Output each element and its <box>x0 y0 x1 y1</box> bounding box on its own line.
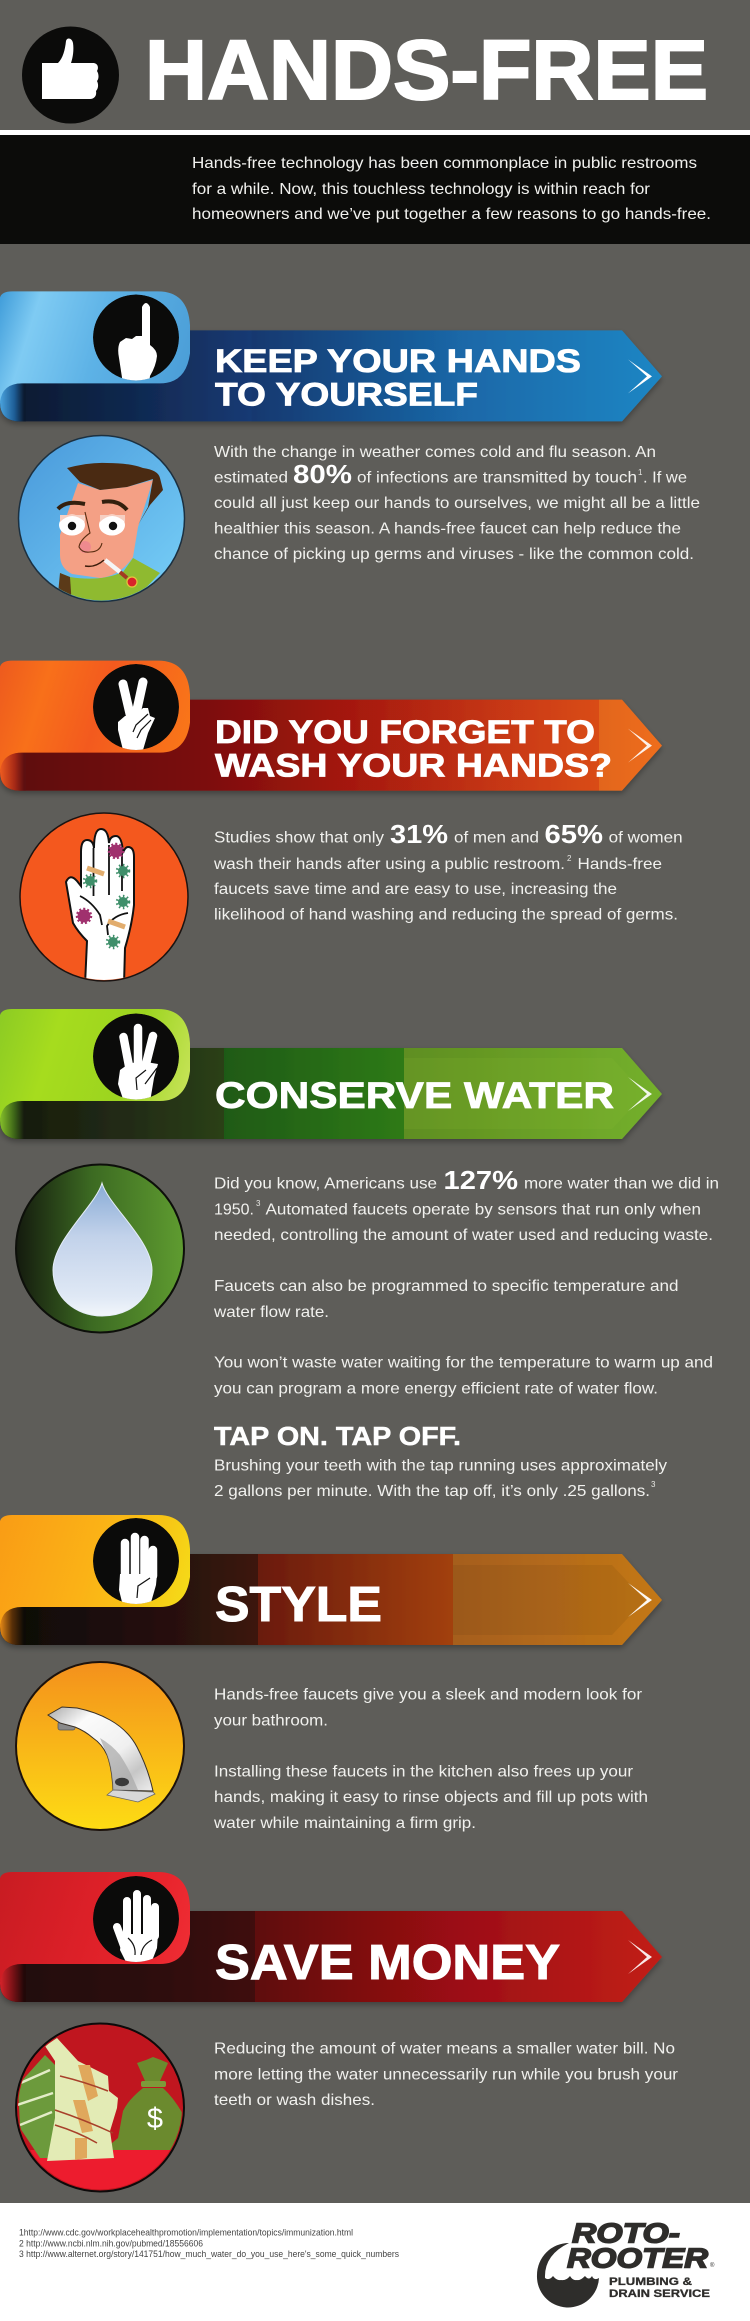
sources <box>19 2228 399 2260</box>
intro text: Hands-free technology has been commonplace in public restrooms <box>192 155 697 172</box>
text: wash your hands <box>213 819 683 924</box>
text: conserve water: water flow rate. <box>213 1304 329 1321</box>
money bag <box>112 2057 182 2150</box>
logo: roto-rooter: ROTO- <box>572 2218 680 2248</box>
illustration: money <box>10 2024 190 2200</box>
text: keep your hands: chance of picking up germs and viruses - like the common cold. <box>214 546 694 563</box>
text: conserve water: needed, controlling the amount of water used and reducing waste. <box>214 1227 713 1244</box>
text: keep your hands: With the change in weather comes cold and flu season. An <box>214 444 656 461</box>
germs <box>77 844 129 948</box>
logo: roto-rooter: DRAIN SERVICE <box>609 2288 710 2300</box>
icon: four fingers <box>93 1518 179 1606</box>
text: wash your hands: 2 <box>567 854 572 863</box>
sources: 1http://www.cdc.gov/workplacehealthpromotion/implementation/topics/immunization.html <box>19 2228 353 2238</box>
money bag: $ <box>147 2103 163 2135</box>
text: style: water while maintaining a firm grip. <box>213 1815 476 1832</box>
illustration: water drop <box>16 1164 184 1332</box>
text: keep your hands: could all just keep our hands to ourselves, we might all be a little <box>214 495 700 512</box>
text: conserve water: 1950. <box>214 1202 254 1218</box>
text: save money: more letting the water unnecessarily run while you brush your <box>214 2066 679 2084</box>
title: HANDS-FREE <box>145 23 708 117</box>
heading: WASH YOUR HANDS? <box>215 748 612 784</box>
text: keep your hands <box>214 444 700 563</box>
text: conserve water: Automated faucets operate by sensors that run only when <box>266 1202 701 1218</box>
text: save money: teeth or wash dishes. <box>214 2092 375 2109</box>
text: tap on tap off: 3 <box>651 1480 656 1489</box>
header <box>22 23 708 124</box>
text: style: hands, making it easy to rinse objects and fill up pots with <box>214 1789 648 1806</box>
logo: roto-rooter: ® <box>710 2262 715 2269</box>
text: wash your hands: of women <box>609 830 683 846</box>
heading <box>215 714 612 784</box>
text: keep your hands: healthier this season. A hands-free faucet can help reduce the <box>214 520 681 538</box>
intro text <box>192 155 711 223</box>
icon: open hand <box>93 1876 179 1966</box>
heading <box>215 343 581 412</box>
text: keep your hands: of infections are transmitted by touch <box>357 470 637 486</box>
heading: STYLE <box>215 1578 382 1632</box>
logo: roto-rooter: PLUMBING & <box>609 2276 692 2288</box>
icon: three fingers <box>93 1014 179 1102</box>
text: conserve water: 127% <box>444 1165 518 1195</box>
ribbon: style <box>0 1515 662 1645</box>
intro text: homeowners and we’ve put together a few reasons to go hands-free. <box>192 206 711 223</box>
text: wash your hands: of men and <box>454 830 539 846</box>
text: wash your hands: 65% <box>544 819 603 849</box>
sources: 2 http://www.ncbi.nlm.nih.gov/pubmed/18556606 <box>19 2238 203 2250</box>
icon: thumbs up <box>22 26 119 124</box>
heading: TO YOURSELF <box>215 376 478 412</box>
text: conserve water: more water than we did in <box>524 1176 719 1192</box>
illustration: hand with germs <box>20 813 188 985</box>
text: style <box>213 1686 648 1832</box>
illustration: sick man <box>18 436 184 606</box>
text: style: Hands-free faucets give you a sleek and modern look for <box>214 1686 643 1704</box>
text: style: Installing these faucets in the kitchen also frees up your <box>214 1764 634 1780</box>
text: wash your hands: wash their hands after using a public restroom. <box>213 856 565 873</box>
text: wash your hands: Hands-free <box>578 856 662 873</box>
logo: roto-rooter <box>537 2218 715 2307</box>
intro band <box>0 130 750 244</box>
text: conserve water: Faucets can also be programmed to specific temperature and <box>214 1278 678 1295</box>
text: save money <box>214 2040 679 2109</box>
subheading: tap on tap off: TAP ON. TAP OFF. <box>214 1423 461 1451</box>
text: conserve water: Did you know, Americans use <box>214 1176 437 1192</box>
text: conserve water: 3 <box>256 1199 261 1208</box>
text: save money: Reducing the amount of water means a smaller water bill. No <box>214 2040 675 2058</box>
text: tap on tap off: Brushing your teeth with the tap running uses approximately <box>214 1458 667 1474</box>
icon: two fingers <box>93 664 179 750</box>
heading: CONSERVE WATER <box>215 1074 614 1116</box>
text: conserve water: you can program a more energy efficient rate of water flow. <box>214 1380 658 1398</box>
intro text: for a while. Now, this touchless technology is within reach for <box>192 181 651 198</box>
icon: one finger <box>93 294 179 384</box>
ribbon: conserve water <box>0 1009 662 1139</box>
heading: KEEP YOUR HANDS <box>215 343 581 379</box>
text: tap on tap off: 2 gallons per minute. With the tap off, it’s only .25 gallons. <box>214 1483 650 1500</box>
sources: 3 http://www.alternet.org/story/141751/how_much_water_do_you_use_here's_some_quick_numbers <box>19 2249 399 2260</box>
heading: SAVE MONEY <box>215 1936 560 1990</box>
text: conserve water: You won’t waste water waiting for the temperature to warm up and <box>214 1354 713 1372</box>
text: wash your hands: likelihood of hand washing and reducing the spread of germs. <box>214 906 678 924</box>
text: style: your bathroom. <box>214 1712 328 1730</box>
faucet <box>48 1707 155 1802</box>
text: tap on tap off <box>214 1458 667 1500</box>
text: wash your hands: 31% <box>390 819 448 849</box>
heading: DID YOU FORGET TO <box>215 714 595 750</box>
text: wash your hands: Studies show that only <box>214 830 384 846</box>
ribbon: save money <box>0 1872 662 2002</box>
ribbon: keep your hands to yourself <box>0 291 662 421</box>
text: keep your hands: estimated <box>214 470 288 486</box>
illustration: faucet <box>16 1662 184 1830</box>
text: wash your hands: faucets save time and are easy to use, increasing the <box>214 881 617 898</box>
footer <box>0 2203 750 2321</box>
text: keep your hands: 1 <box>638 468 643 477</box>
text: keep your hands: 80% <box>293 459 352 489</box>
ribbon: did you forget to wash your hands <box>0 661 662 791</box>
text: conserve water <box>213 1165 719 1398</box>
logo: roto-rooter: ROOTER <box>567 2242 709 2274</box>
text: keep your hands: . If we <box>643 470 687 486</box>
